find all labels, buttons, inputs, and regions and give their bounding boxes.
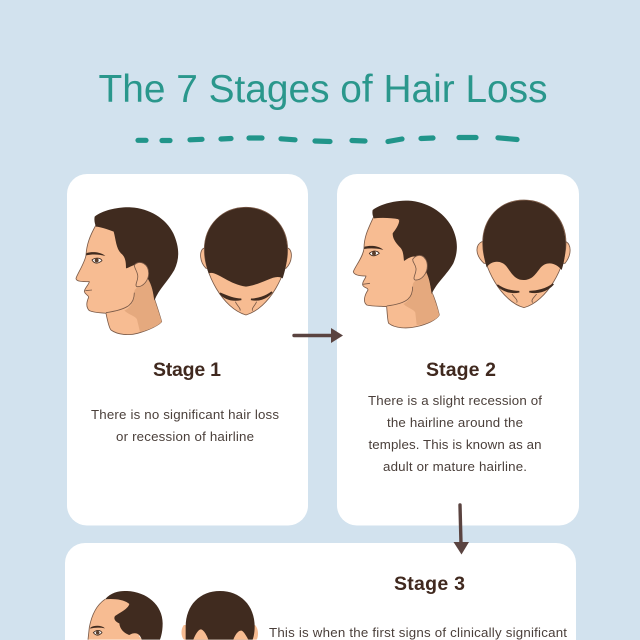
panel: stage 3 bbox=[65, 543, 576, 640]
text: stage 2 description: adult or mature hairline. bbox=[383, 459, 527, 474]
icon: stage 1 side head bbox=[76, 207, 178, 335]
text: stage 2 description bbox=[368, 393, 542, 474]
text: stage 2 description: temples. This is known as an bbox=[368, 437, 542, 452]
icon: stage 3 side head bbox=[88, 591, 163, 640]
dashed decorative underline bbox=[138, 138, 517, 142]
icon: stage 2 side head bbox=[353, 201, 457, 328]
icon: stage 1 top head bbox=[201, 207, 291, 315]
text: stage 1 description bbox=[91, 407, 279, 444]
panel: stage 1 bbox=[67, 174, 308, 526]
panel: stage 2 bbox=[337, 174, 579, 526]
title: The 7 Stages of Hair Loss bbox=[98, 68, 548, 111]
icon: stage 2 top head bbox=[477, 200, 570, 308]
text: stage 1 description: or recession of hairline bbox=[116, 429, 254, 444]
text: stage 2 description: There is a slight recession of bbox=[368, 393, 542, 408]
arrow: stage 1 to stage 2 bbox=[294, 328, 343, 343]
text: stage 3 description: This is when the first signs of clinically significant bbox=[269, 625, 567, 640]
heading: stage 2: Stage 2 bbox=[426, 359, 496, 381]
arrow: stage 2 to stage 3 bbox=[454, 505, 469, 554]
heading: stage 1: Stage 1 bbox=[153, 359, 221, 381]
heading: stage 3: Stage 3 bbox=[394, 573, 465, 595]
text: stage 2 description: the hairline around the bbox=[387, 415, 523, 430]
icon: stage 3 top head bbox=[181, 591, 258, 640]
text: stage 1 description: There is no significant hair loss bbox=[91, 407, 279, 422]
